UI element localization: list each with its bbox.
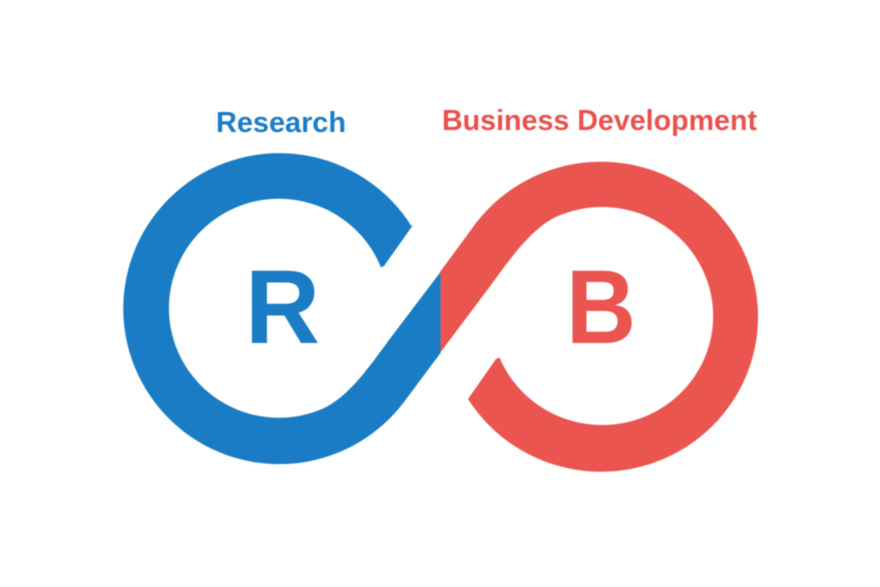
red loop	[440, 162, 758, 472]
letter B: B	[566, 249, 636, 366]
heading: Business Development: Business Development	[442, 105, 757, 137]
letter R: R	[245, 249, 320, 366]
blue loop	[123, 153, 440, 464]
heading: Research: Research	[216, 107, 346, 139]
